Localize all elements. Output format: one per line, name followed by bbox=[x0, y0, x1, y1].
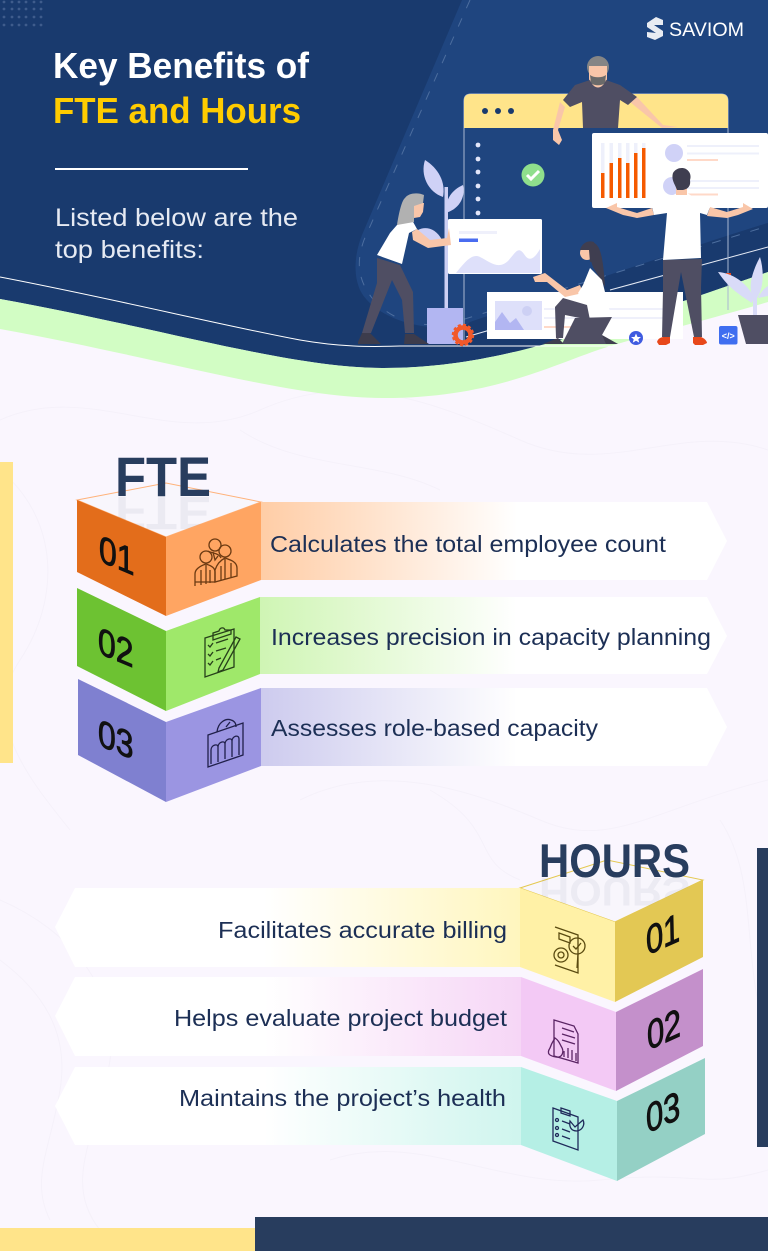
benefit 3 bar: Maintains the project’s health bbox=[179, 1085, 506, 1111]
block 01 bbox=[520, 880, 703, 1002]
block 03 bbox=[78, 679, 261, 802]
title bbox=[53, 45, 310, 131]
lighter backdrop panel bbox=[356, 0, 768, 328]
person: man at top bbox=[553, 56, 678, 145]
icon: gear bbox=[453, 325, 473, 345]
section: Hours bbox=[55, 834, 705, 1181]
icon: star badge bbox=[629, 331, 643, 345]
block 01: 01 bbox=[642, 905, 683, 963]
Hours heading: HOURS bbox=[539, 834, 690, 887]
block 02: 02 bbox=[98, 618, 134, 676]
benefit 3 bar: Assesses role-based capacity bbox=[271, 715, 599, 741]
block top face bbox=[77, 483, 261, 537]
icon: team bbox=[195, 539, 237, 586]
image card bbox=[487, 292, 683, 339]
block 02 bbox=[521, 969, 703, 1091]
header background bbox=[0, 0, 768, 368]
section: FTE bbox=[77, 445, 727, 802]
benefit 1 bar bbox=[261, 502, 727, 580]
plant pot bbox=[427, 308, 463, 344]
block 02 bbox=[77, 588, 260, 711]
intro text bbox=[55, 204, 298, 264]
title divider bbox=[55, 168, 248, 170]
icon: audit bbox=[554, 927, 585, 973]
block 03: 03 bbox=[642, 1083, 683, 1141]
title: FTE and Hours bbox=[53, 90, 301, 131]
benefit 2 bar bbox=[55, 977, 521, 1056]
icon: clipboard bbox=[205, 628, 240, 677]
dark diagonal band bbox=[440, 223, 768, 352]
chart panel bbox=[592, 133, 768, 208]
browser window bbox=[464, 94, 728, 344]
person: kneeling woman bbox=[533, 241, 618, 344]
block top face bbox=[520, 860, 703, 922]
icon: checklist bbox=[553, 1108, 584, 1150]
footer bar: yellow bbox=[0, 1228, 255, 1251]
benefit 2 bar: Increases precision in capacity planning bbox=[271, 624, 711, 650]
illustration: team and dashboards bbox=[358, 56, 768, 345]
chart card bbox=[448, 219, 542, 274]
intro text: top benefits: bbox=[55, 236, 204, 264]
road lines bbox=[466, 247, 768, 337]
Hours reflection: HOURS bbox=[539, 869, 690, 913]
FTE heading: FTE bbox=[115, 445, 211, 508]
benefit 2 bar bbox=[260, 597, 727, 674]
icon: gauge and staff bbox=[208, 720, 243, 767]
block 01 bbox=[77, 500, 261, 616]
benefit 1 bar: Facilitates accurate billing bbox=[218, 917, 507, 943]
block 03 bbox=[521, 1058, 705, 1181]
green wave bbox=[0, 272, 768, 398]
icon: check badge bbox=[522, 164, 544, 186]
logo: Saviom: SAVIOM bbox=[669, 20, 744, 41]
white wave line bbox=[0, 277, 617, 346]
person: man holding panel bbox=[606, 168, 753, 345]
block 02: 02 bbox=[643, 1000, 684, 1058]
decorative dot grid bbox=[3, 1, 42, 26]
FTE reflection: FTE bbox=[115, 487, 211, 539]
benefit 1 bar: Calculates the total employee count bbox=[270, 531, 667, 557]
side accent: yellow bbox=[0, 462, 13, 763]
footer bar: navy bbox=[255, 1217, 768, 1251]
block 01: 01 bbox=[99, 526, 135, 584]
icon: code badge: </> bbox=[722, 331, 735, 341]
benefit 3 bar bbox=[261, 688, 727, 766]
block 03: 03 bbox=[98, 710, 134, 768]
icon: code badge bbox=[719, 326, 738, 344]
person: woman pushing bbox=[358, 193, 451, 344]
dashed road markings bbox=[359, 0, 768, 325]
benefit 2 bar: Helps evaluate project budget bbox=[174, 1005, 508, 1031]
plant: left bbox=[418, 160, 464, 309]
side accent: navy bbox=[757, 848, 768, 1147]
title: Key Benefits of bbox=[53, 45, 310, 86]
icon: budget report bbox=[548, 1020, 578, 1063]
benefit 3 bar bbox=[55, 1067, 521, 1145]
logo: Saviom bbox=[647, 17, 744, 41]
intro text: Listed below are the bbox=[55, 204, 298, 232]
benefit 1 bar bbox=[55, 888, 520, 967]
plant: right bbox=[718, 257, 768, 344]
